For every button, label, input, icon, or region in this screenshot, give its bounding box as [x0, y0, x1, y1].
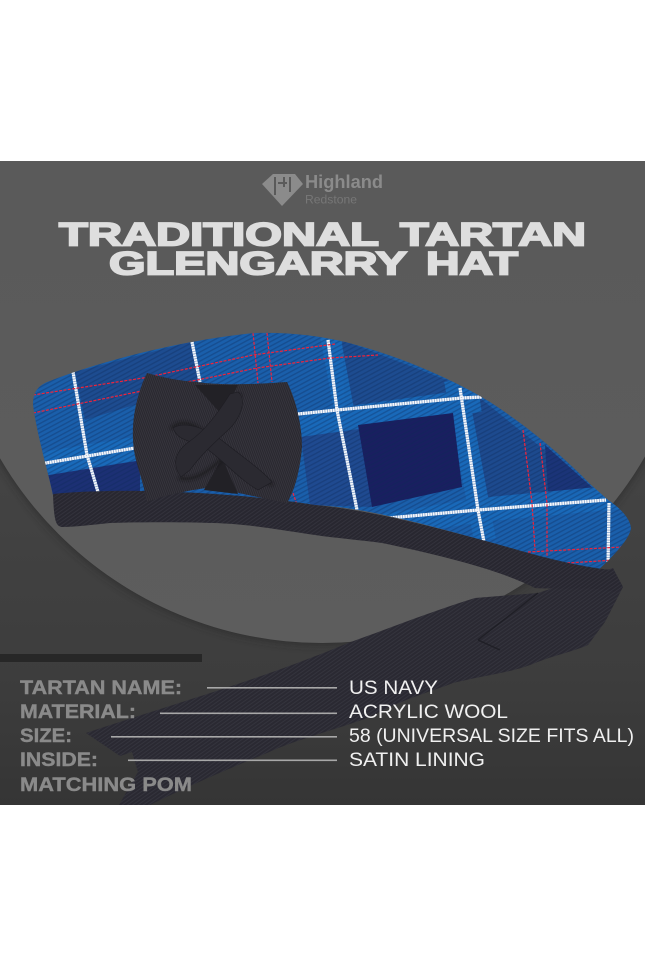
ribbon tail: [86, 568, 623, 805]
logo mark: diamond H: [262, 174, 303, 206]
panel: dark product background: [0, 161, 645, 805]
spec: inside: SATIN LINING: [349, 750, 485, 771]
spec: tartan name: US NAVY: [349, 678, 438, 699]
spec: tartan name: TARTAN NAME:: [20, 678, 182, 699]
spec: inside: INSIDE:: [20, 750, 98, 771]
hat crown: blue tartan: [33, 332, 631, 568]
hat band: [53, 491, 623, 592]
title: TRADITIONAL: [59, 216, 379, 252]
title: HAT: [426, 246, 519, 282]
tartan dark panels: [40, 340, 600, 507]
logo: Highland Redstone: Redstone: [305, 194, 357, 206]
title: TARTAN: [400, 216, 586, 252]
spec: material: [20, 702, 508, 723]
spec: size: SIZE:: [20, 726, 72, 747]
divider bar: [0, 654, 202, 662]
logo: Highland Redstone: Highland: [305, 172, 383, 192]
tartan bright bands: [30, 335, 620, 540]
rosette bow: [133, 373, 302, 503]
twill texture: [33, 333, 630, 568]
spec: size: [20, 726, 634, 747]
spec: material: ACRYLIC WOOL: [349, 702, 508, 723]
tartan navy square: [358, 413, 462, 507]
title: GLENGARRY: [109, 246, 407, 282]
spec: tartan name: [20, 678, 438, 699]
title: [59, 216, 586, 282]
red stripes: [33, 333, 622, 563]
rosette knot ribbons: [173, 392, 272, 490]
spec: matching pom: MATCHING POM: [20, 775, 192, 796]
infographic canvas: [0, 161, 645, 805]
specification list: [20, 678, 634, 796]
rosette knot centre pieces: [195, 385, 238, 494]
logo: Highland Redstone: [262, 172, 383, 206]
white stripes: [40, 340, 609, 566]
spec: material: MATERIAL:: [20, 702, 136, 723]
spec: size: 58 (UNIVERSAL SIZE FITS ALL): [349, 726, 634, 747]
ribbon fold: [478, 593, 538, 650]
spec: inside: [20, 750, 485, 771]
rosette knot shadows: [172, 395, 272, 484]
